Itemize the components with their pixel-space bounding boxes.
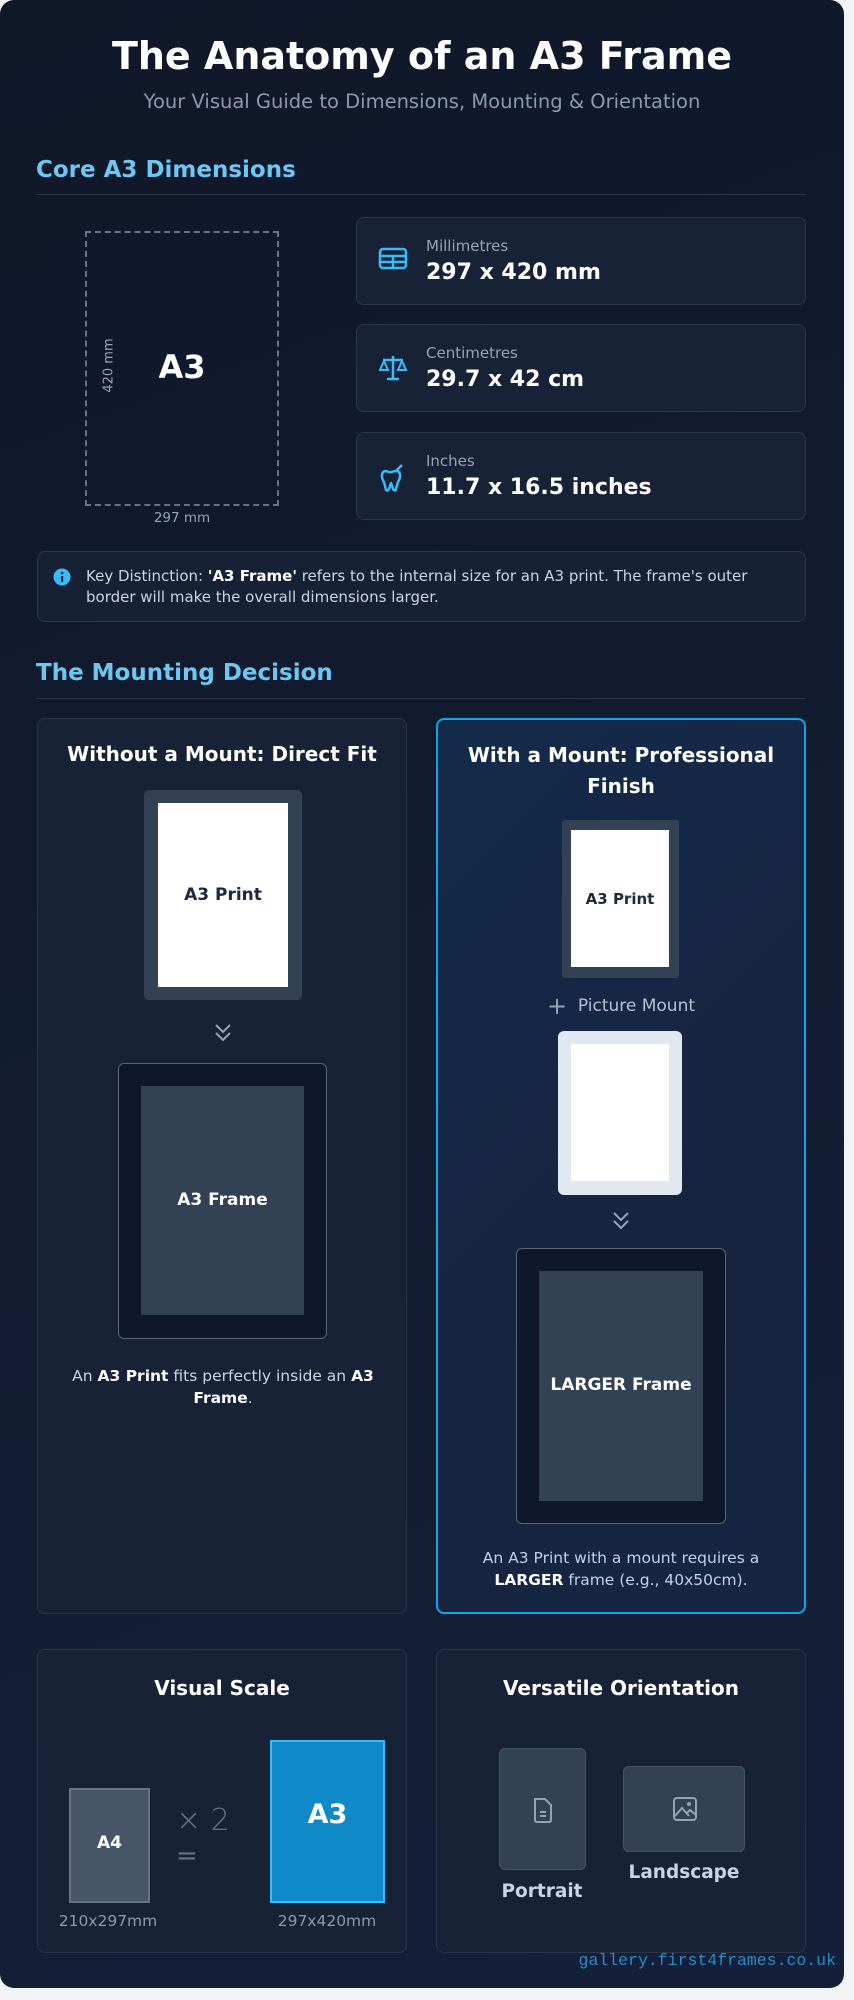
card: inches: Inches xyxy=(426,452,475,470)
print diagram xyxy=(144,790,302,1000)
card: centimetres xyxy=(356,324,806,412)
frame diagram xyxy=(118,1063,327,1339)
subtitle: Your Visual Guide to Dimensions, Mounting & Orientation xyxy=(144,90,700,113)
A3 box: A3 xyxy=(308,1799,347,1830)
mount diagram xyxy=(558,1031,682,1195)
larger frame diagram xyxy=(516,1248,726,1524)
label landscape: Landscape xyxy=(629,1862,739,1883)
icon: info xyxy=(54,568,70,586)
A4 box: A4 xyxy=(97,1833,122,1853)
info callout xyxy=(37,551,806,622)
heading: core dimensions: Core A3 Dimensions xyxy=(36,157,296,183)
icon: table xyxy=(378,248,408,270)
icon: image xyxy=(673,1797,697,1821)
panel: without mount xyxy=(37,718,407,1614)
equals: = xyxy=(176,1841,198,1871)
print diagram xyxy=(562,820,679,978)
card: centimetres: 29.7 x 42 cm xyxy=(426,367,584,392)
A3 dashed diagram: 420 mm xyxy=(102,338,116,393)
larger frame diagram: LARGER Frame xyxy=(550,1375,692,1395)
A4 box xyxy=(69,1788,150,1903)
A3 dashed diagram: A3 xyxy=(158,348,206,386)
label portrait: Portrait xyxy=(501,1881,583,1902)
landscape xyxy=(623,1766,745,1852)
panel title: Without a Mount: Direct Fit xyxy=(67,742,377,766)
print diagram: A3 Print xyxy=(184,885,262,905)
footer url: gallery.first4frames.co.uk xyxy=(579,1951,836,1970)
label 297 mm: 297 mm xyxy=(154,510,210,526)
icon: scales xyxy=(378,356,408,380)
portrait xyxy=(499,1748,586,1870)
card: centimetres: Centimetres xyxy=(426,344,518,362)
card: millimetres xyxy=(356,217,806,305)
arrow chevrons xyxy=(613,1212,629,1230)
panel title: With a Mount: Professional Finish xyxy=(468,743,774,798)
panel: visual scale: 297x420mm xyxy=(278,1912,376,1930)
panel: visual scale xyxy=(37,1649,407,1953)
arrow chevrons xyxy=(215,1024,231,1042)
card: inches: 11.7 x 16.5 inches xyxy=(426,475,652,500)
frame diagram: A3 Frame xyxy=(177,1190,268,1210)
panel: orientation xyxy=(436,1649,806,1953)
print diagram: A3 Print xyxy=(586,890,654,908)
card: millimetres: 297 x 420 mm xyxy=(426,260,601,285)
A3 dashed diagram xyxy=(85,231,279,506)
caption: An A3 Print fits perfectly inside an A3 Frame. xyxy=(72,1367,374,1407)
times 2: × 2 xyxy=(176,1803,230,1838)
panel title: Visual Scale xyxy=(154,1676,290,1700)
icon: document xyxy=(534,1798,552,1823)
info callout: Key Distinction: 'A3 Frame' refers to the internal size for an A3 print. The frame's outer border will make the overall dimensions larger. xyxy=(86,567,747,606)
card: inches xyxy=(356,432,806,520)
card: millimetres: Millimetres xyxy=(426,237,508,255)
panel: with mount xyxy=(436,718,806,1614)
plus picture mount: + Picture Mount xyxy=(547,992,695,1020)
caption: An A3 Print with a mount requires a LARGER frame (e.g., 40x50cm). xyxy=(483,1549,759,1589)
labels: 210x297mm xyxy=(59,1912,157,1930)
panel title: Versatile Orientation xyxy=(503,1676,739,1700)
icon: tooth xyxy=(380,464,403,492)
heading: mounting decision: The Mounting Decision xyxy=(36,660,333,686)
A3 box xyxy=(270,1740,385,1903)
title: The Anatomy of an A3 Frame xyxy=(112,34,732,78)
